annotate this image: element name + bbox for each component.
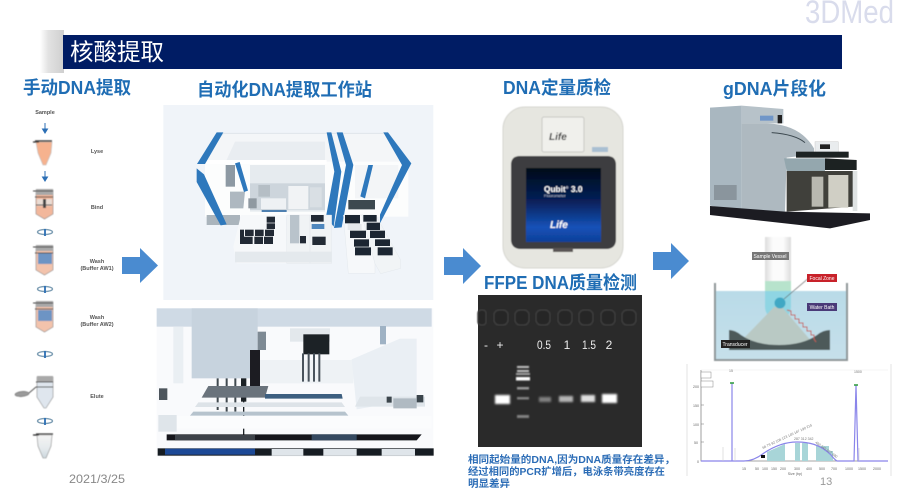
photo: Covaris sonicator	[710, 106, 870, 228]
tube: wash AW2	[33, 301, 53, 332]
label: lyse: Lyse	[91, 149, 103, 155]
caption: 明显差异	[468, 477, 510, 490]
logo: Life flap: Life	[549, 132, 567, 143]
photo: Qubit 3.0 fluorometer	[503, 107, 623, 268]
tube: elute	[15, 376, 53, 408]
x-axis labels	[742, 467, 881, 476]
drawers right	[343, 215, 375, 273]
caption: 相同起始量的DNA,因为DNA质量存在差异，	[468, 453, 675, 466]
label: transducer: Transducer	[722, 342, 748, 348]
y-axis labels: 150	[693, 404, 699, 408]
x-axis labels: 1500	[858, 467, 866, 471]
x-axis labels: 15	[742, 467, 746, 471]
photo: automated workstation	[163, 105, 433, 300]
label: bind: Bind	[91, 205, 103, 211]
manual extraction protocol	[15, 110, 114, 458]
label: elute: Elute	[90, 394, 104, 400]
gel electrophoresis image	[478, 295, 642, 447]
peak labels: 490 545 607 680	[814, 441, 838, 459]
y-axis labels: 0	[697, 460, 699, 464]
peak labels: 66 79 92 106 123 145 167 190 215	[762, 423, 813, 450]
y-axis labels	[693, 385, 699, 464]
x-axis labels: 300	[794, 467, 800, 471]
wells	[478, 310, 636, 325]
peak labels: 287 312 342	[794, 437, 814, 441]
pipette head left	[192, 308, 258, 378]
arrow: down	[42, 123, 48, 133]
y-axis labels: 200	[693, 385, 699, 389]
x-axis labels: 400	[806, 467, 812, 471]
x-axis labels: 500	[819, 467, 825, 471]
tube: final	[33, 434, 53, 458]
heading: automated workstation: 自动化DNA提取工作站	[197, 79, 372, 100]
heading: manual DNA extraction: 手动DNA提取	[23, 77, 131, 98]
title: 核酸提取	[70, 39, 164, 65]
icon: spin	[38, 418, 52, 425]
peaks and trace	[701, 383, 888, 461]
pipette head right	[290, 328, 330, 342]
step: sample: Sample	[35, 110, 55, 116]
y-axis labels: 100	[693, 423, 699, 427]
label: wash AW1: Wash	[90, 259, 104, 265]
x-axis labels: 2000	[873, 467, 881, 471]
title bar	[40, 30, 842, 73]
transducer dish	[729, 330, 830, 350]
label: wash AW1: (Buffer AW1)	[80, 266, 114, 272]
device screen text: 3.0	[569, 184, 583, 194]
tube: lyse	[33, 141, 52, 165]
blue stripes	[197, 132, 411, 228]
x-axis labels: Size (bp)	[788, 472, 802, 476]
caption: 经过相同的PCR扩增后，电泳条带亮度存在	[468, 465, 665, 478]
lane labels: -	[484, 338, 488, 352]
chart: fragment size distribution	[687, 364, 891, 476]
x-axis labels: 200	[780, 467, 786, 471]
date: 2021/3/25	[69, 472, 125, 486]
white box	[352, 339, 417, 409]
label: focal zone: Focal Zone	[809, 276, 835, 282]
arrow: QC to fragmentation	[653, 243, 689, 279]
icon: spin	[38, 229, 52, 236]
label: transducer	[721, 340, 750, 348]
peak labels: 1500	[854, 370, 862, 374]
device subtitle: Fluorometer	[544, 193, 566, 198]
bands	[495, 394, 617, 404]
teal bins	[767, 443, 833, 461]
wave	[787, 310, 816, 342]
x-axis labels: 100	[762, 467, 768, 471]
lane labels: 0.5	[537, 338, 551, 352]
x-axis labels: 1000	[845, 467, 853, 471]
logo: Life screen: Life	[550, 220, 568, 231]
arrow: automated to QC	[444, 248, 481, 284]
icon: spin	[38, 351, 52, 358]
heading: DNA QC: DNA定量质检	[503, 77, 611, 98]
lane labels: 1	[564, 338, 571, 352]
photo: pipetting deck	[157, 308, 434, 457]
label: wash AW2: (Buffer AW2)	[80, 322, 114, 328]
y-axis labels: 50	[694, 441, 698, 445]
diagram: ultrasonic bath	[715, 237, 847, 360]
peak labels	[729, 369, 862, 459]
legend box	[701, 372, 713, 387]
label: water bath	[807, 303, 837, 311]
label: focal zone	[807, 274, 837, 282]
deck plates	[202, 386, 268, 398]
focal zone	[774, 298, 786, 308]
slide number fragment: 13	[820, 476, 832, 488]
lane labels: 2	[606, 338, 613, 352]
label: sample vessel	[752, 252, 789, 260]
x-axis labels: 50	[755, 467, 759, 471]
peak labels: 15	[729, 369, 733, 373]
caption	[468, 453, 675, 490]
tube: bind	[33, 189, 53, 219]
device screen text: Qubit	[544, 184, 566, 194]
heading: gDNA fragmentation: gDNA片段化	[723, 78, 826, 99]
lane labels: 1.5	[582, 338, 596, 352]
tank wall	[715, 283, 847, 360]
lane labels	[484, 338, 613, 352]
x-axis labels: 700	[831, 467, 837, 471]
tip racks	[167, 434, 422, 440]
label: sample vessel: Sample Vessel	[753, 254, 787, 260]
drawers left	[233, 215, 287, 263]
label: water bath: Water Bath	[810, 305, 835, 311]
arrow: down	[42, 171, 48, 181]
heading: FFPE DNA quality: FFPE DNA质量检测	[484, 272, 637, 293]
ultrasonic cone	[744, 307, 812, 350]
tube: wash AW1	[33, 245, 53, 275]
x-axis labels: 150	[771, 467, 777, 471]
device screen text: ®	[566, 185, 569, 190]
arrow: manual to automated	[122, 248, 158, 283]
ladder	[516, 366, 530, 418]
icon: spin	[38, 286, 52, 293]
lane labels: +	[496, 338, 504, 352]
label: wash AW2: Wash	[90, 315, 104, 321]
